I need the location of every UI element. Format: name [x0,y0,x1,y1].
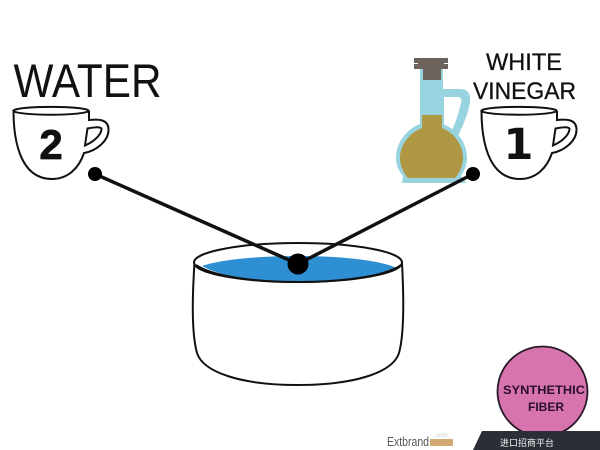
badge: synthetic fiber [498,346,588,436]
badge: synthetic fiber: SYNTHETHIC [503,383,585,397]
logo: Extbrand: Extbrand [387,434,429,449]
cup: white vinegar, 1 part [481,107,577,179]
cup: white vinegar, 1 part: 1 [504,120,533,170]
heading: water: WATER [14,54,162,107]
footer bar: 进口招商平台 [500,437,554,448]
heading: white vinegar: VINEGAR [473,78,576,105]
connector: water to pot [88,167,298,264]
footer bar [473,431,600,450]
heading: white vinegar [473,49,576,105]
heading: white vinegar: WHITE [486,49,562,76]
water surface [202,256,397,282]
connector: vinegar to pot [298,167,480,264]
cup: water, 2 parts [13,107,109,179]
badge: synthetic fiber: FIBER [528,400,564,414]
cup: water, 2 parts: 2 [39,121,63,168]
logo: Extbrand: .com [434,433,448,439]
pot of water [193,243,403,385]
mixing point [288,254,308,274]
icon: vinegar bottle [396,58,470,183]
